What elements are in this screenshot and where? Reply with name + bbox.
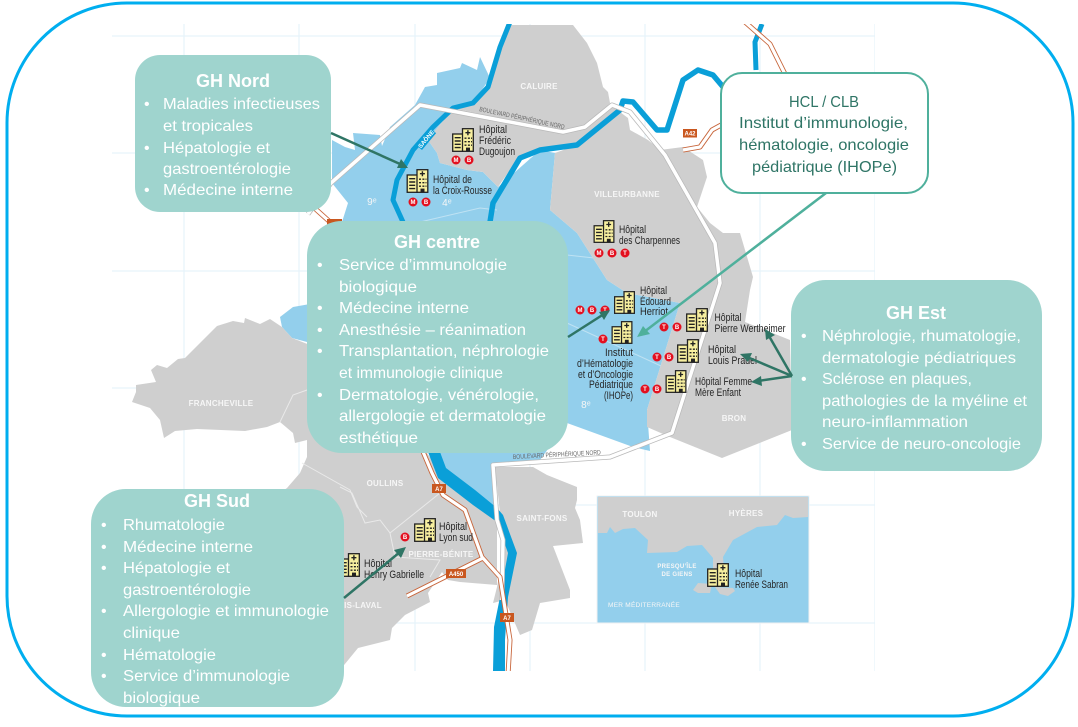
list: GH Sud specialties: • [101, 668, 107, 685]
hospital: Lyon Sud: Hôpital [439, 521, 467, 533]
hospital: Édouard Herriot: M [578, 308, 582, 314]
list: GH centre specialties: Dermatologie, vénérologie, [339, 387, 539, 404]
hospital: Édouard Herriot: Herriot [640, 306, 668, 318]
arrow: GH Sud to Lyon Sud [344, 547, 406, 598]
list: GH centre specialties: • [317, 322, 323, 339]
hospital: Charpennes: T [623, 251, 627, 257]
hospital: Frédéric Dugoujon [452, 124, 515, 164]
panel: GH centre [307, 221, 568, 453]
hospital: Renée Sabran [708, 564, 788, 591]
list: GH centre specialties: • [317, 257, 323, 274]
list: GH Est specialties: pathologies de la myéline et [822, 393, 1028, 410]
place names: OULLINS [367, 479, 404, 488]
inset map: Giens: PRESQU’ÎLE [657, 562, 697, 570]
list: GH Sud specialties: Hématologie [123, 647, 216, 664]
panel: HCL / CLB IHOPe: HCL / CLB [789, 94, 859, 111]
water: western lake [280, 304, 307, 342]
list: GH Est specialties: dermatologie pédiatriques [822, 350, 1016, 367]
panel: GH Sud [91, 489, 344, 707]
list: GH centre specialties: Transplantation, néphrologie [339, 343, 549, 360]
list: GH Sud specialties: Médecine interne [123, 539, 253, 556]
inset map: Giens: DE GIENS [661, 572, 693, 578]
list: GH Est specialties: • [801, 328, 807, 345]
place names [189, 82, 746, 610]
list: GH Sud specialties: clinique [123, 625, 180, 642]
hospital: Renée Sabran: Hôpital [735, 568, 762, 580]
hospital: IHOPe: (IHOPe) [604, 390, 633, 402]
hospital: Édouard Herriot: B [590, 308, 595, 314]
arrow: GH Est to Louis Pradel [740, 353, 792, 376]
list: GH Nord specialties: • [144, 182, 150, 199]
hospital: Femme Mère Enfant: B [655, 387, 660, 393]
hospital: Louis Pradel: B [667, 355, 672, 361]
list: GH Est specialties [801, 328, 1028, 453]
place names: VILLEURBANNE [594, 190, 660, 199]
arrow: GH centre to Édouard Herriot [568, 310, 610, 337]
hospital: IHOPe: T [601, 337, 605, 343]
hospital: Louis Pradel: T [655, 355, 659, 361]
ring road labels [479, 104, 601, 461]
area: Caluire [453, 25, 610, 132]
arrow: HCL / CLB to IHOPe [637, 193, 826, 337]
list: GH centre specialties: Médecine interne [339, 300, 469, 317]
road badges: A7 [503, 616, 511, 622]
list: GH centre specialties: Service d’immunologie [339, 257, 507, 274]
road badges: A450 [449, 572, 464, 578]
place names: BRON [722, 414, 746, 423]
map of Lyon [112, 22, 875, 680]
place names: FRANCHEVILLE [189, 399, 254, 408]
arrow: GH Est to Pierre Wertheimer [765, 329, 792, 376]
place names: 8ᵉ [581, 400, 591, 411]
hospital: Femme Mère Enfant [640, 371, 752, 399]
hospital: Édouard Herriot: Hôpital [640, 285, 667, 297]
Rhône river, south section [428, 452, 517, 671]
list: GH Nord specialties: Hépatologie et [163, 140, 271, 157]
hospital: Frédéric Dugoujon: Hôpital [479, 124, 507, 136]
hospital: Lyon Sud: B [403, 535, 408, 541]
inset map: Giens: TOULON [622, 510, 658, 519]
heading: GH centre: GH centre [394, 232, 480, 252]
hospital: Frédéric Dugoujon: Frédéric [479, 135, 511, 147]
list: GH Sud specialties: Rhumatologie [123, 517, 225, 534]
list: GH centre specialties: • [317, 300, 323, 317]
list: GH centre specialties: esthétique [339, 430, 418, 447]
hospital: Édouard Herriot: T [603, 308, 607, 314]
list: GH centre specialties [317, 257, 549, 447]
arrow: GH Est to Femme Mère Enfant [751, 376, 792, 386]
hospital: Charpennes [594, 221, 680, 258]
hospital: IHOPe: et d’Oncologie [578, 369, 633, 381]
Rhône river [490, 70, 724, 222]
hospital: Lyon Sud: Lyon sud [439, 532, 473, 544]
road badges: A7 [435, 487, 443, 493]
hospital: Pierre Wertheimer: Hôpital [714, 312, 742, 324]
hospital: Pierre Wertheimer: Pierre Wertheimer [714, 323, 786, 335]
motorway A7 and A450 [300, 22, 786, 675]
hospital: Pierre Wertheimer: T [662, 325, 666, 331]
list: GH Sud specialties: gastroentérologie [123, 582, 251, 599]
hospital: Femme Mère Enfant: T [643, 387, 647, 393]
list: GH centre specialties: Anesthésie – réanimation [339, 322, 526, 339]
area: Villeurbanne and Bron [550, 112, 792, 458]
panel: HCL / CLB IHOPe: Institut d’immunologie, [739, 115, 908, 132]
list: GH Nord specialties: gastroentérologie [163, 161, 291, 178]
place names: CALUIRE [520, 82, 558, 91]
list: GH Est specialties: • [801, 371, 807, 388]
list: GH Est specialties: Sclérose en plaques, [822, 371, 972, 388]
list: GH Nord specialties: et tropicales [163, 118, 253, 135]
inset map: Giens: HYÈRES [729, 509, 764, 518]
Saône label: SAÔNE [416, 128, 436, 150]
hospital: IHOPe: Pédiatrique [589, 379, 633, 391]
place names: PIERRE-BÉNITE [408, 550, 474, 559]
ring road [308, 105, 720, 600]
hospital: Charpennes: Hôpital [619, 224, 646, 236]
hospital: Charpennes: M [596, 251, 602, 257]
inset map: Giens [597, 496, 809, 623]
list: GH Nord specialties [144, 96, 320, 199]
road badges: A42 [684, 132, 696, 138]
list: GH Sud specialties: • [101, 539, 107, 556]
Saône river [393, 22, 510, 222]
hospital: Croix-Rousse: la Croix-Rousse [433, 185, 492, 197]
area: Francheville [132, 318, 497, 680]
hospital: Frédéric Dugoujon: Dugoujon [479, 146, 515, 158]
list: GH Est specialties: Néphrologie, rhumatologie, [822, 328, 1021, 345]
list: GH Nord specialties: Médecine interne [163, 182, 293, 199]
list: GH Nord specialties: Maladies infectieuses [163, 96, 320, 113]
panel: HCL / CLB IHOPe: hématologie, oncologie [739, 137, 909, 154]
hospital: Louis Pradel [652, 340, 757, 367]
list: GH centre specialties: • [317, 343, 323, 360]
road badges [327, 129, 697, 622]
list: GH Sud specialties [101, 517, 329, 707]
hospital: IHOPe: d’Hématologie [577, 358, 633, 370]
place names: IS-LAVAL [344, 601, 382, 610]
list: GH centre specialties: allergologie et dermatologie [339, 408, 546, 425]
hospital: Louis Pradel: Louis Pradel [708, 355, 757, 367]
panel: HCL / CLB IHOPe [721, 73, 928, 193]
list: GH centre specialties: et immunologie clinique [339, 365, 503, 382]
hospital: Femme Mère Enfant: Mère Enfant [695, 387, 741, 399]
hospital: Pierre Wertheimer [660, 309, 786, 335]
list: GH Sud specialties: • [101, 647, 107, 664]
hospital: Renée Sabran: Renée Sabran [735, 579, 788, 591]
hospital: Lyon Sud [400, 519, 473, 544]
arrow: GH Nord to Croix-Rousse [331, 133, 408, 168]
list: GH Nord specialties: • [144, 96, 150, 113]
hospital: Croix-Rousse: M [410, 200, 416, 206]
heading: GH Nord: GH Nord [196, 71, 270, 91]
hospital: Édouard Herriot [576, 286, 670, 315]
list: GH Est specialties: Service de neuro-oncologie [822, 436, 1021, 453]
water: central Lyon [330, 57, 680, 520]
list: GH Sud specialties: Hépatologie et [123, 560, 231, 577]
Rhône river, north-east section [755, 24, 762, 70]
list: GH Sud specialties: • [101, 517, 107, 534]
list: GH centre specialties: biologique [339, 279, 417, 296]
hospital: Charpennes: B [610, 251, 615, 257]
heading: GH Sud: GH Sud [184, 491, 250, 511]
hospital: Croix-Rousse [407, 170, 492, 206]
hospital: IHOPe: Institut [605, 347, 633, 359]
hospital: Charpennes: des Charpennes [619, 235, 680, 247]
panel: HCL / CLB IHOPe: pédiatrique (IHOPe) [752, 159, 897, 176]
list: GH Nord specialties: • [144, 140, 150, 157]
hospital: Femme Mère Enfant: Hôpital Femme [695, 376, 752, 388]
area: Croix-Rousse [428, 103, 620, 187]
list: GH Sud specialties: biologique [123, 690, 200, 707]
hospital: Croix-Rousse: B [424, 200, 429, 206]
inset map: Giens: MER MÉDITERRANÉE [608, 600, 680, 609]
panel: GH Est [791, 280, 1042, 471]
list: GH Sud specialties: • [101, 603, 107, 620]
list: GH Est specialties: neuro-inflammation [822, 414, 968, 431]
ring road labels: BOULEVARD PÉRIPHÉRIQUE NORD [479, 104, 566, 131]
area: Saint-Fons [493, 467, 583, 635]
hospital: Édouard Herriot: Édouard [640, 295, 671, 308]
hospital: Pierre Wertheimer: B [675, 325, 680, 331]
place names: 4ᵉ [442, 198, 452, 209]
list: GH Est specialties: • [801, 436, 807, 453]
list: GH centre specialties: • [317, 387, 323, 404]
hospital: Frédéric Dugoujon: M [454, 158, 458, 164]
hospital: Henry Gabrielle: Hôpital [364, 558, 392, 570]
heading: GH Est: GH Est [886, 303, 946, 323]
hospital: Henry Gabrielle [339, 554, 424, 581]
hospital: Frédéric Dugoujon: B [467, 158, 472, 164]
ring road labels: BOULEVARD PÉRIPHÉRIQUE NORD [513, 447, 601, 461]
hospital: Henry Gabrielle: Henry Gabrielle [364, 569, 424, 581]
hospital: IHOPe [577, 322, 633, 402]
list: GH Sud specialties: Allergologie et immunologie [123, 603, 329, 620]
list: GH Sud specialties: Service d’immunologie [123, 668, 290, 685]
panel: GH Nord [135, 55, 331, 212]
hospital: Louis Pradel: Hôpital [708, 344, 736, 356]
place names: SAINT-FONS [517, 514, 568, 523]
place names: 9ᵉ [367, 197, 377, 208]
list: GH Sud specialties: • [101, 560, 107, 577]
hospital: Croix-Rousse: Hôpital de [433, 174, 472, 186]
